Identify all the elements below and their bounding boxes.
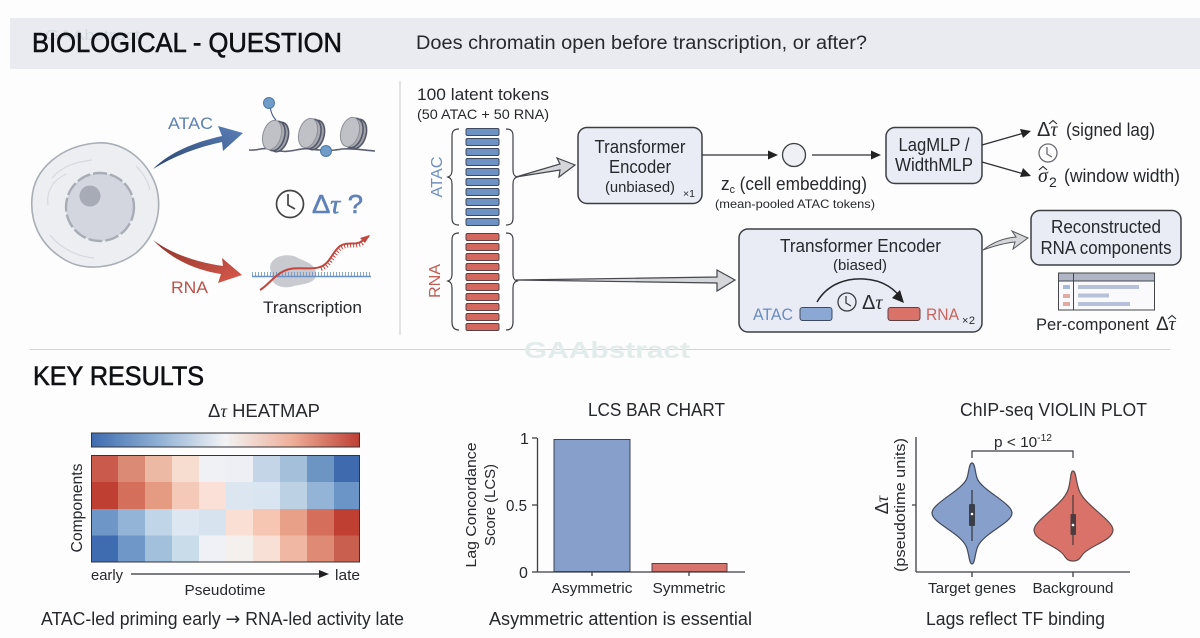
label: ATAC source: ATAC (753, 305, 793, 324)
output: window width (1038, 165, 1180, 190)
label: transcription: Transcription (263, 298, 362, 317)
y axis label (872, 438, 909, 572)
panel: MLP box (886, 128, 982, 184)
label: RNA: RNA (171, 278, 209, 297)
heading: latent tokens: 100 latent tokens (417, 85, 549, 104)
y ticks: 0.5 (506, 498, 527, 515)
label: RNA target: RNA (926, 305, 960, 324)
p value: p < 10 (994, 434, 1036, 451)
caption: heatmap: ATAC-led priming early → RNA-led activity late (41, 609, 404, 630)
label: cell embedding: (cell embedding) (735, 174, 867, 194)
panel: biased encoder: ×2 (962, 315, 975, 327)
arrow: RNA to encoder (516, 270, 735, 291)
icon: clock (838, 293, 856, 311)
sublabel: mean pooled: (mean-pooled ATAC tokens) (715, 197, 875, 211)
axes (912, 437, 1130, 577)
panel: biased encoder: (biased) (833, 257, 887, 274)
ATAC tokens (466, 128, 499, 226)
panel: unbiased encoder: (unbiased) (605, 179, 675, 196)
icon: small clock (1039, 144, 1057, 162)
x label: pseudotime: Pseudotime (184, 582, 266, 599)
p value: -12 (1037, 433, 1052, 444)
label: per component: Per-component (1036, 315, 1149, 334)
panel: unbiased encoder: ×1 (683, 188, 695, 200)
panel: bar chart (463, 400, 752, 629)
panel: unbiased encoder (578, 128, 702, 204)
arrow: RNA (153, 240, 242, 283)
panel: unbiased encoder: Encoder (609, 157, 671, 177)
x label: symmetric: Symmetric (652, 580, 726, 597)
RNA token (888, 308, 920, 320)
ATAC token (800, 308, 832, 320)
arrow: ATAC (153, 126, 243, 169)
x label: background: Background (1032, 580, 1114, 597)
panel: reconstructed RNA components: Reconstructed (1051, 217, 1161, 237)
panel: biological question header (10, 18, 1200, 69)
output: window width: (window width) (1064, 166, 1180, 186)
bar chart title: LCS BAR CHART (588, 400, 725, 420)
violin title: ChIP-seq VIOLIN PLOT (960, 400, 1147, 420)
heading: biological question: BIOLOGICAL - QUESTION (32, 27, 342, 58)
label: ATAC: ATAC (168, 114, 213, 133)
y label: components: Components (69, 464, 86, 552)
watermark: GAAbstract (524, 337, 690, 363)
y axis label (463, 442, 499, 568)
output: window width: 2 (1049, 174, 1057, 190)
x label: target genes: Target genes (928, 580, 1016, 597)
y ticks: 0 (519, 565, 528, 582)
x label: early: early (91, 567, 123, 584)
label: cell embedding: c (730, 184, 735, 196)
divider (399, 81, 401, 335)
panel: biased encoder: Transformer Encoder (780, 236, 941, 256)
output: signed lag: (signed lag) (1066, 120, 1155, 140)
panel: biological question header: GAAbstract (45, 27, 141, 44)
y ticks (506, 431, 529, 582)
label: ATAC axis: ATAC (429, 156, 446, 198)
sublabel: token composition: (50 ATAC + 50 RNA) (417, 106, 549, 122)
RNA tokens (466, 234, 499, 330)
icon: cell (32, 143, 159, 267)
heatmap title: Δτ HEATMAP (208, 401, 320, 421)
output: window width: σ (1038, 165, 1049, 187)
colour bar (92, 433, 360, 447)
x label: asymmetric: Asymmetric (552, 580, 633, 597)
label: per component: Δτ (1156, 314, 1177, 335)
panel: latent tokens (417, 85, 549, 330)
panel: violin plot (872, 400, 1147, 629)
label: RNA axis: RNA (427, 264, 444, 298)
y axis label: Δτ (872, 495, 892, 514)
arrow: ATAC to encoder (516, 158, 575, 177)
question text: Does chromatin open before transcription, or after? (416, 33, 867, 54)
label: cell embedding: z (721, 174, 730, 194)
attention arc (817, 279, 904, 303)
axes (532, 438, 745, 576)
icon: nucleosomes (249, 98, 375, 156)
label: delta tau question: Δτ ? (312, 189, 363, 219)
output: signed lag (1037, 119, 1155, 141)
panel: reconstructed RNA components: RNA components (1040, 238, 1172, 258)
label: delta tau: Δτ (862, 292, 883, 314)
braces (448, 129, 517, 330)
cell embedding node (782, 144, 806, 166)
heatmap grid (91, 455, 360, 562)
panel: heatmap (41, 401, 404, 630)
panel: biology illustration (32, 98, 375, 317)
caption: violin: Lags reflect TF binding (926, 609, 1105, 629)
arrow: signed lag (982, 129, 1031, 145)
icon: component table (1058, 273, 1154, 310)
significance bracket (972, 451, 1073, 458)
violin: target genes (932, 463, 1012, 564)
icon: transcription (252, 235, 371, 290)
arrow: embedding to MLP (812, 150, 881, 160)
output: signed lag: Δτ (1037, 119, 1058, 141)
panel: MLP box: WidthMLP (895, 155, 973, 175)
panel: biased encoder (739, 229, 982, 332)
y axis label: Lag Concordance (463, 443, 480, 567)
panel: reconstructed RNA components (1031, 210, 1181, 265)
caption: bar chart: Asymmetric attention is essential (489, 609, 752, 629)
y ticks: 1 (520, 431, 529, 448)
panel: MLP box: LagMLP / (898, 135, 970, 155)
bar: asymmetric (554, 440, 630, 572)
pseudotime arrow (131, 570, 329, 578)
violin: background (1034, 471, 1113, 561)
y axis label: (pseudotime units) (892, 438, 909, 572)
icon: clock (276, 190, 304, 218)
bar: symmetric (652, 564, 727, 572)
arrow: encoder to embedding (702, 150, 778, 160)
arrow: encoder to reconstruction (983, 231, 1028, 250)
panel: unbiased encoder: Transformer (594, 137, 686, 157)
y axis label: Score (LCS) (482, 464, 499, 546)
x label: late: late (335, 567, 360, 584)
arrow: window width (982, 162, 1031, 177)
heading: key results: KEY RESULTS (33, 361, 204, 391)
